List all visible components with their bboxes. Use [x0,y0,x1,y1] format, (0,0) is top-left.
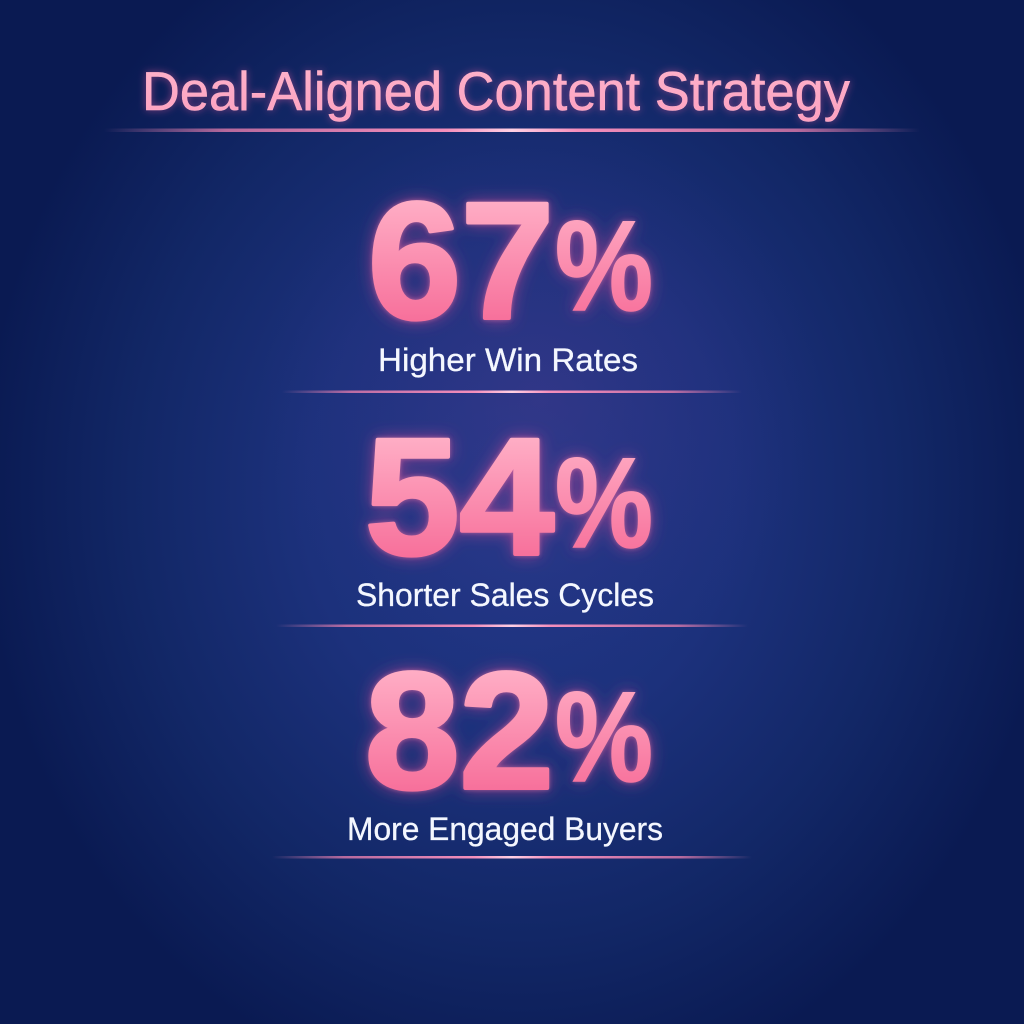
number: 54%: % [555,432,653,575]
number: 67% [368,169,653,354]
stat: 54% shorter sales cycles [356,405,654,613]
number: 82% [365,639,653,824]
title: Deal-Aligned Content Strategy [142,60,850,122]
number: 54% [365,405,653,590]
number: 82%: % [555,666,653,809]
stat: 82% more engaged buyers [347,639,663,847]
number: 67%: 67 [368,169,554,354]
divider 2 [276,624,748,627]
divider 1 [282,390,742,393]
title divider [104,128,920,132]
label: Higher Win Rates: Higher Win Rates [378,342,638,378]
label: Shorter Sales Cycles: Shorter Sales Cycles [356,577,654,613]
number: 82%: 82 [365,639,554,824]
stat: 67% higher win rates [368,169,653,378]
label: More Engaged Buyers: More Engaged Buyers [347,811,663,847]
number: 54%: 54 [365,405,554,590]
divider 3 [272,856,752,858]
number: 67%: % [555,195,653,338]
